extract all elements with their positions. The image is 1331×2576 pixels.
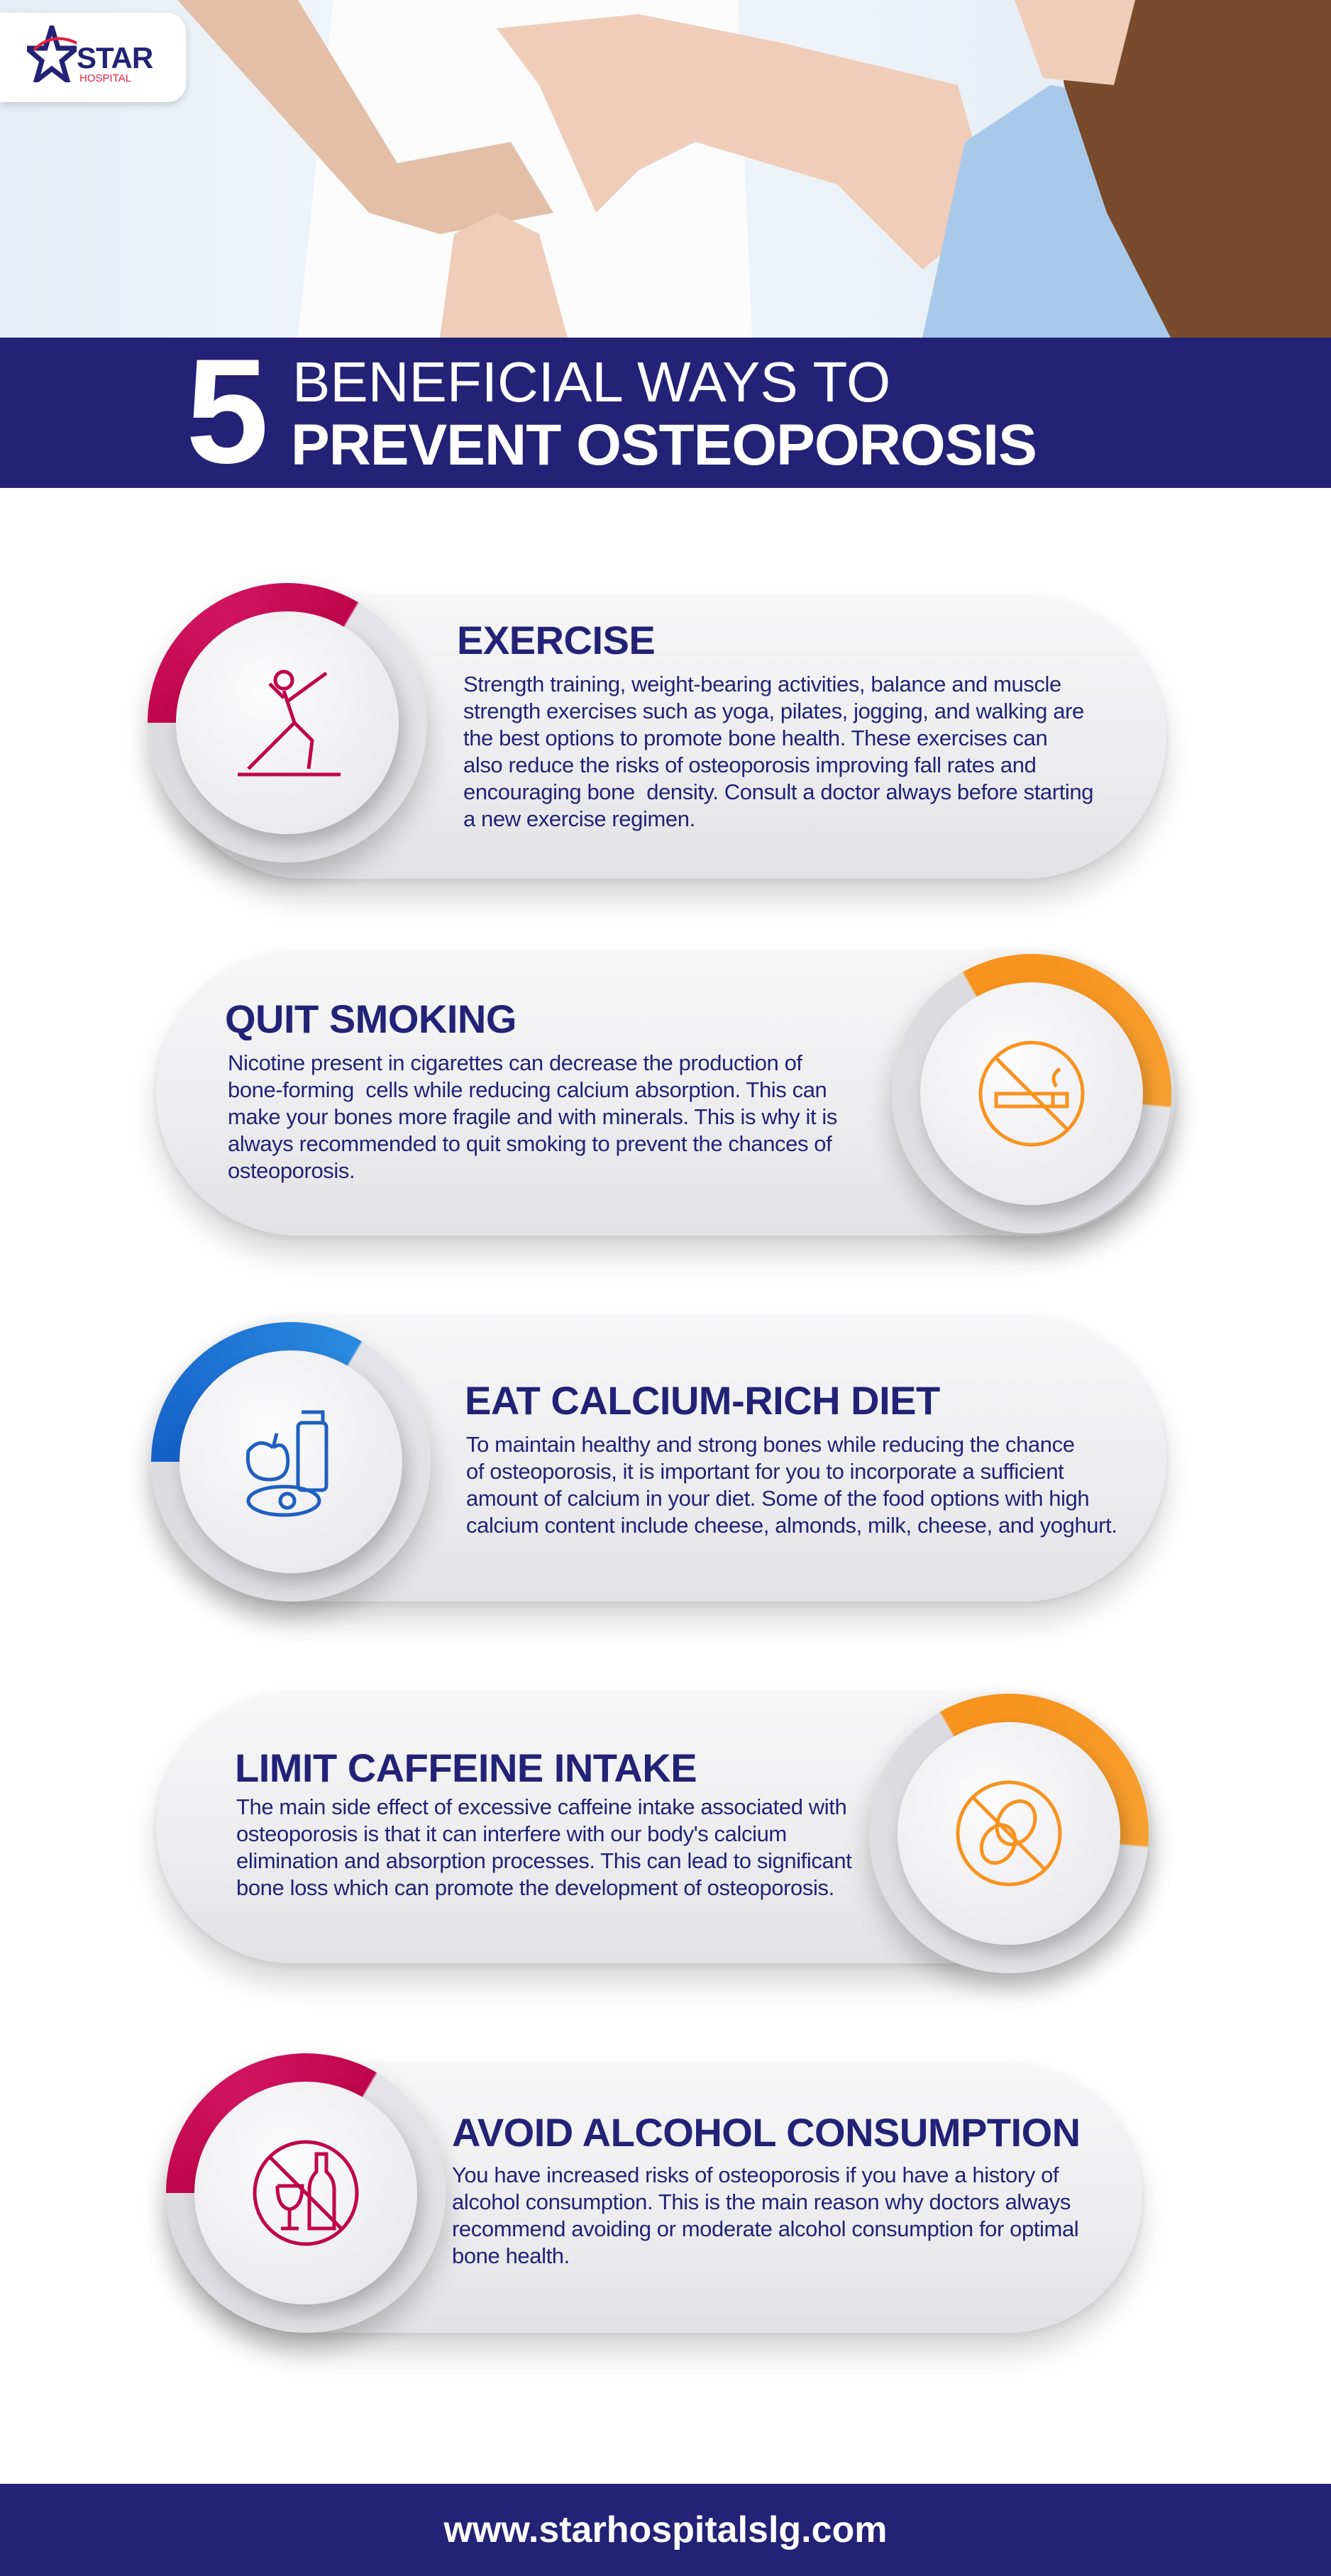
- panel: quit smoking: make your bones more fragile and with minerals. This is why it is: [228, 1104, 837, 1129]
- footer: www.starhospitalslg.com: [443, 2509, 888, 2550]
- title band: [0, 338, 1331, 488]
- header photo: [0, 0, 1331, 338]
- panel: exercise: a new exercise regimen.: [463, 806, 695, 831]
- panel: exercise: Strength training, weight-bearing activities, balance and muscle: [463, 672, 1061, 696]
- panel: exercise: strength exercises such as yoga, pilates, jogging, and walking are: [463, 699, 1084, 723]
- panel: calcium diet: EAT CALCIUM-RICH DIET: [465, 1378, 940, 1423]
- footer: [0, 2484, 1331, 2576]
- panel: alcohol: [150, 2053, 1152, 2367]
- panel: alcohol: You have increased risks of osteoporosis if you have a history of: [452, 2163, 1059, 2187]
- title band: PREVENT OSTEOPOROSIS: [291, 413, 1037, 477]
- panel: calcium diet: of osteoporosis, it is important for you to incorporate a sufficient: [466, 1459, 1064, 1484]
- panel: exercise: encouraging bone density. Consult a doctor always before starting: [463, 779, 1093, 804]
- panel: caffeine: elimination and absorption processes. This can lead to significant: [236, 1848, 851, 1873]
- title band: BENEFICIAL WAYS TO: [292, 350, 890, 413]
- logo: [0, 13, 186, 102]
- panel: quit smoking: QUIT SMOKING: [225, 996, 517, 1041]
- panel: alcohol: recommend avoiding or moderate alcohol consumption for optimal: [452, 2216, 1078, 2241]
- panel: exercise: [136, 583, 1176, 909]
- panel: caffeine: [146, 1691, 1165, 2003]
- panel: exercise: the best options to promote bone health. These exercises can: [463, 726, 1047, 750]
- panel: calcium diet: calcium content include cheese, almonds, milk, cheese, and yoghurt.: [466, 1513, 1117, 1538]
- icon: no alcohol: [166, 2053, 446, 2333]
- panel: calcium diet: amount of calcium in your diet. Some of the food options with high: [466, 1486, 1089, 1511]
- icon: no coffee: [869, 1694, 1149, 1973]
- panel: caffeine: LIMIT CAFFEINE INTAKE: [235, 1745, 697, 1790]
- panel: quit smoking: [146, 949, 1189, 1268]
- icon: food: [151, 1322, 431, 1601]
- panel: quit smoking: always recommended to quit smoking to prevent the chances of: [228, 1131, 832, 1156]
- panel: exercise: also reduce the risks of osteoporosis improving fall rates and: [463, 753, 1036, 777]
- panel: calcium diet: To maintain healthy and strong bones while reducing the chance: [466, 1432, 1075, 1457]
- icon: no smoking: [892, 954, 1171, 1233]
- title band: 5: [186, 328, 269, 494]
- icon: star: [27, 26, 77, 82]
- panel: alcohol: bone health.: [452, 2243, 570, 2268]
- panel: alcohol: alcohol consumption. This is the main reason why doctors always: [452, 2189, 1071, 2214]
- panel: calcium diet: [137, 1314, 1176, 1636]
- panel: caffeine: osteoporosis is that it can interfere with our body's calcium: [236, 1821, 787, 1846]
- panel: quit smoking: Nicotine present in cigarettes can decrease the production of: [228, 1050, 802, 1075]
- icon: exercise: [148, 583, 427, 862]
- panel: caffeine: The main side effect of excessive caffeine intake associated with: [236, 1794, 846, 1819]
- panel: quit smoking: osteoporosis.: [228, 1158, 355, 1183]
- panel: alcohol: AVOID ALCOHOL CONSUMPTION: [452, 2110, 1081, 2155]
- logo: HOSPITAL: [79, 72, 131, 84]
- panel: caffeine: bone loss which can promote the development of osteoporosis.: [236, 1875, 834, 1900]
- logo: STAR: [77, 41, 153, 74]
- panel: quit smoking: bone-forming cells while reducing calcium absorption. This can: [228, 1077, 827, 1102]
- panel: exercise: EXERCISE: [457, 618, 655, 662]
